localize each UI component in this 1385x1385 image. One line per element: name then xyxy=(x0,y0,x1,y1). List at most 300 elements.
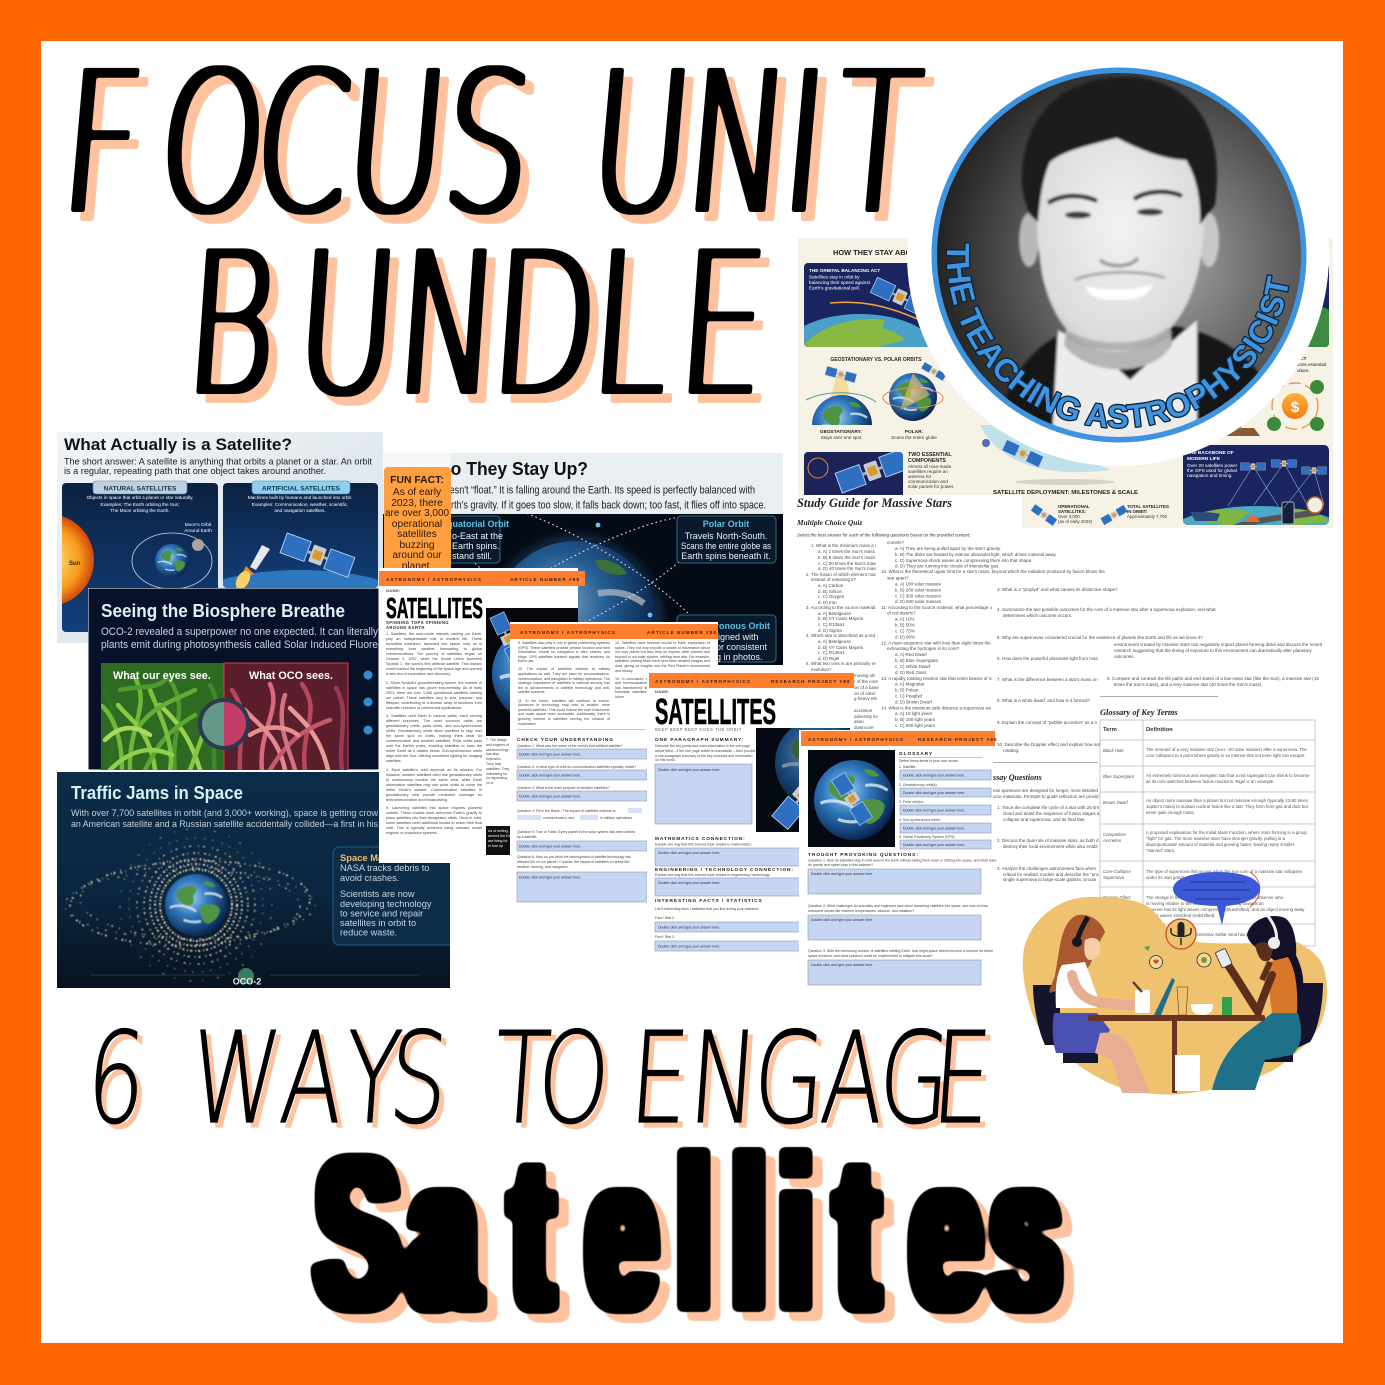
section: glossary: 5. Global Positioning System (GPS): xyxy=(899,835,955,839)
tag: natural satellites: NATURAL SATELLITES xyxy=(104,486,177,492)
chairs xyxy=(1033,983,1323,1063)
quiz column 1: d. D) Iron xyxy=(818,600,837,605)
table: glossary: as its core switches between fusion reactions. Rigel is an example. xyxy=(1146,779,1274,784)
article column 2: 14. Satellites have become crucial to Earth exploration of space. They not only provide a wealth of information about our own planet but also help us explore other planets and beyond in our solar system, orbiting from afar. For example, satellites orbiting Mars have sent back detailed images and data, giving us insights into the Red Planet's environment and history. xyxy=(615,641,710,673)
essay question list: 2. Discuss the dual role of massive stars, as both d xyxy=(997,838,1099,843)
question 4: Question 4: Fill in the Blank - The impact of satellites extends to xyxy=(517,809,616,813)
header band xyxy=(649,673,854,688)
quiz column 1: c. C) R136a1 xyxy=(818,622,845,627)
table: glossary: Supernova xyxy=(1103,875,1125,880)
article body: 2. Since Sputnik's groundbreaking launch, the number of satellites in space has grown exponentially. As of early 2023, there are over 3,000 operational satellites orbiting our planet. These satellites vary in size, purpose, and lifespan, contributing to a diverse array of functions from scientific research to commercial applications. xyxy=(386,680,482,710)
quiz column 2: c. C) 75% xyxy=(895,628,915,634)
subtitle: BEEP BEEP BEEP GOES THE ORBIT xyxy=(655,727,742,732)
quiz column 1: b. B) 8 times the Sun's mass xyxy=(818,555,876,560)
document: Study Guide for Massive Stars xyxy=(796,495,1322,946)
hidden column fragments: on of a base xyxy=(854,685,879,690)
header band xyxy=(801,731,998,746)
question 2: Question 2: In what type of orbit do communication satellites typically reside? xyxy=(517,765,636,769)
circular wordmark: THE TEACHING ASTROPHYSICIST xyxy=(946,242,1290,429)
title: BUNDLE: BUNDLE xyxy=(180,210,773,440)
quiz column 1: 2. The fusion of which element mark xyxy=(806,572,879,577)
section: glossary xyxy=(899,751,991,849)
callout: fun fact: are over 3,000 xyxy=(385,508,449,519)
box: polar orbit: Earth spins beneath it. xyxy=(681,551,771,561)
box: sun-synchronous orbit: Sun-Synchronous Orbit xyxy=(668,621,770,631)
text: 7,700 satellites: an American satellite and a Russian satellite accidentally collided—a first in his xyxy=(71,819,378,830)
quiz column 1: c. C) R136a1 xyxy=(818,650,845,655)
section: one paragraph summary: article titled – if the one page article is unavailable – then provide xyxy=(655,749,755,753)
article columns: 11. In the future, satellites will continue to evolve. Advances in technology may lead to smaller, more powerful satellites. This could reduce the cost of launches and make space more accessible. Additionally, there is growing interest in satellites serving the mission of exploration. xyxy=(518,699,610,726)
diagram: money cycle xyxy=(1222,380,1324,436)
quiz column 1: 6. What two ores in are primarily res xyxy=(806,661,879,666)
card: natural satellites: Sun xyxy=(69,561,81,567)
column 2 fragments: 7. The design and engines of sat technology has also improved. They help satellites. They interesting for us depending on w xyxy=(486,738,509,785)
text: economic impact: tions essential xyxy=(1297,362,1326,367)
section: glossary: 3. Polar orbit(s): xyxy=(899,800,924,804)
stat: total satellites xyxy=(1100,504,1169,525)
quiz column 1: 4. Which star is described as a red xyxy=(806,633,876,638)
circular wordmark: THE TEACHING ASTROPHYSICIST xyxy=(946,244,1288,428)
text: two essential components: TWO ESSENTIAL xyxy=(908,452,952,458)
document: research project page 2 xyxy=(799,730,998,990)
section: interesting facts: Fact / Stat 2: xyxy=(655,935,675,939)
illustration: deployment satellite and swoosh xyxy=(980,425,1115,485)
question 1: Question 1: What was the name of the world's first artificial satellite? xyxy=(517,744,623,748)
card: orbital balancing act xyxy=(804,263,928,347)
header band: ASTRONOMY / ASTROPHYSICS xyxy=(386,577,482,582)
article body: 4. Each satellite's orbit depends on its mission. For instance, weather satellites often use geostationary orbits to continuously monitor the same area, while Earth observation satellites may use polar orbits to cover the entire Earth's surface. Communication satellites in geostationary orbit provide consistent coverage for telecommunication and broadcasting. xyxy=(386,768,482,802)
icons: small reactions xyxy=(1144,946,1211,968)
quiz column 1: a. A) 2 times the Sun's mass xyxy=(818,549,876,554)
short-answer questions: 7. What is the difference between a star's mass on xyxy=(997,677,1098,682)
heading: Seeing the Biosphere Breathe: Seeing the Biosphere Breathe xyxy=(101,600,345,621)
short-answer questions: determines which outcome occurs. xyxy=(1003,613,1072,618)
short-answer questions: 9. Explain the concept of “pebble accretion” as a n xyxy=(997,720,1098,725)
short-answer questions: 6. How does the powerful ultraviolet light from mas xyxy=(997,656,1099,661)
question 4 xyxy=(517,808,642,820)
short-answer questions: 4. Summarize the two possible outcomes for the core of a massive star after a supernova explosion, and what xyxy=(997,607,1216,612)
section: engineering connection: ENGINEERING / TECHNOLOGY CONNECTION: xyxy=(655,867,794,873)
section: thought provoking questions: THOUGHT PROVOKING QUESTIONS: xyxy=(808,852,919,858)
text: two essential components xyxy=(908,452,952,464)
callout: fun fact: operational xyxy=(392,519,442,530)
section: glossary: Double click and type your answer here. xyxy=(903,774,965,778)
quiz column 1: b. B) VY Canis Majoris xyxy=(818,616,864,621)
table: glossary: disproportionate amount of material and growing faster, leaving many smaller, xyxy=(1146,842,1295,847)
callout: fun fact: buzzing xyxy=(399,540,435,551)
black note box: in turn up xyxy=(488,844,503,848)
quiz column 2: 14. What is the minimum safe distance a supernova wo xyxy=(881,706,992,710)
text: components description: solar panels for power. xyxy=(908,484,954,489)
hidden column fragments: g heavy ele xyxy=(854,696,878,701)
question 6: affected life on our planet? Consider the impact of satellites on areas like xyxy=(517,860,630,864)
quiz column 1: b. B) Silicon xyxy=(818,589,843,594)
section: thought provoking questions: Question 1: How do satellites stay in orbit around the Earth without falling back down or drifting into space, and what roles xyxy=(808,858,997,862)
question 3: Question 3: What is the main purpose of weather satellites? xyxy=(517,786,609,790)
card: orbital balancing act: Satellites stay in orbit by xyxy=(809,274,860,280)
box: polar orbit: Polar Orbit xyxy=(703,519,749,529)
heading: glossary of key terms: Glossary of Key Terms xyxy=(1100,708,1178,717)
question 5: Question 5: True or False: Every planet in the solar system has been orbited xyxy=(517,830,635,834)
box: sun-synchronous orbit xyxy=(668,615,776,662)
stat: total satellites: IN ORBIT: xyxy=(1127,509,1148,514)
section: one paragraph summary: on this world. xyxy=(655,758,676,762)
section: glossary: Double click and type your answer here. xyxy=(903,808,965,812)
heading: check your understanding: CHECK YOUR UNDERSTANDING xyxy=(517,737,614,743)
woman on the right xyxy=(1212,914,1303,1090)
table: glossary xyxy=(1100,720,1315,946)
essay column continuation: outcomes. xyxy=(1114,654,1135,659)
text: short answer: The short answer: A satellite is anything that orbits a planet or a star. An orbit xyxy=(64,456,372,468)
hidden column fragments: r of the core xyxy=(854,679,879,684)
text: economic impact: ACT xyxy=(1297,356,1307,361)
text: falling around the Earth: Earth's gravity. If it goes too slow, it falls back down; too fast, it flies off into space. xyxy=(440,500,766,512)
table: glossary: Definition xyxy=(1146,727,1173,733)
callout: fun fact: satellites xyxy=(397,529,437,540)
text: components description: satellites require an xyxy=(908,469,948,474)
section: engineering connection: Double click and type your answer here. xyxy=(658,881,720,885)
text: components description xyxy=(908,464,954,489)
icon: podcast microphone xyxy=(1166,919,1196,949)
table: glossary: has its waves stretched (redshifted). xyxy=(1146,913,1216,918)
section: glossary: GLOSSARY xyxy=(899,751,933,757)
callout: fun fact: As of early xyxy=(393,487,442,498)
section: glossary: 1. Satellite: xyxy=(899,765,916,769)
quiz column 2: d. D) Red Giant xyxy=(895,670,927,675)
question 1 xyxy=(517,744,647,759)
quiz column 1: 3. According to the source material, xyxy=(806,605,877,610)
hidden column fragments xyxy=(854,673,879,730)
section: thought provoking questions: Double click and type your answer here. xyxy=(811,872,873,876)
card: orbital balancing act: THE ORBITAL BALANCING ACT xyxy=(809,268,880,273)
text: 7,700 satellites xyxy=(71,810,378,829)
text: OCO-2 superpower: OCO-2 revealed a superpower no one expected. It can literally xyxy=(101,626,378,638)
section: interesting facts: Fact / Stat 1: xyxy=(655,916,675,920)
stat: operational satellites xyxy=(1031,504,1093,526)
quiz column 1: a. A) Carbon xyxy=(818,583,844,588)
research image xyxy=(756,728,850,832)
section: mathematics connection xyxy=(655,836,801,866)
stat: operational satellites: Over 3,000 xyxy=(1058,514,1080,519)
card: green earth corner xyxy=(1308,265,1329,347)
table: glossary: The remnant of a very massive star (over ~20 solar masses) after a supernova. The xyxy=(1146,747,1307,752)
short-answer questions: rotating. xyxy=(1003,748,1019,753)
stat: operational satellites: OPERATIONAL xyxy=(1058,504,1090,509)
document: article page 1 xyxy=(379,568,590,863)
card: orbital balancing act: balancing their speed against xyxy=(809,280,871,285)
section: glossary: Double click and type your answer here. xyxy=(903,826,965,830)
diagram: polar orbit xyxy=(883,362,946,440)
quiz column 2: d. D) 500 solar masses xyxy=(895,599,942,604)
panel: How Do They Stay Up xyxy=(383,453,783,665)
speech bubble xyxy=(1173,872,1260,925)
logo: OCO-2: OCO-2 xyxy=(233,976,261,986)
panel: What Actually is a Satellite xyxy=(57,432,383,643)
text: economic impact xyxy=(1297,356,1326,373)
short-answer questions: 3. What is a “proplyd” and what causes its distinctive shape? xyxy=(997,587,1118,592)
heading: study guide title: Study Guide for Massive Stars xyxy=(797,496,952,510)
labels: comparison captions: What OCO sees. xyxy=(249,670,333,682)
section: mathematics connection: Double click and type your answer here. xyxy=(658,851,720,855)
text: short answer: is a regular, repeating path that one object takes around another. xyxy=(64,466,326,477)
callout: fun fact xyxy=(384,467,451,577)
heading: Traffic Jams in Space: Traffic Jams in Space xyxy=(71,782,243,803)
box: sun-synchronous orbit: g in photos. xyxy=(716,652,763,662)
quiz column 2: 11. According to the source material, what percentage o xyxy=(881,605,992,610)
image: what OCO sees xyxy=(224,663,348,770)
box: space management: Space Management: xyxy=(340,852,431,863)
section: thought provoking questions: Double click and type your answer here. xyxy=(811,963,873,967)
title: FOCUS UNIT: FOCUS UNIT xyxy=(54,31,928,258)
section: interesting facts: List 5 interesting facts / statistics that you find during your research: xyxy=(655,907,759,911)
section: one paragraph summary: a one-paragraph summary of the key concepts and information xyxy=(655,754,753,758)
card: artificial satellites: and navigation satellites. xyxy=(274,508,326,513)
box: space management: to service and repair xyxy=(340,908,423,918)
section: glossary: Double click and type your answer here. xyxy=(903,843,965,847)
quiz column 2: b. B) 100 light years xyxy=(895,717,936,722)
essay question list: single supernova to large-scale galactic circula xyxy=(1003,877,1097,882)
essay question list: ese questions are designed for longer, more detailed xyxy=(993,788,1098,793)
box: space management: Scientists are now xyxy=(340,889,415,899)
article columns xyxy=(518,641,610,731)
card: backbone of modern life: the GPS used for global xyxy=(1187,468,1237,473)
portrait photo xyxy=(934,70,1304,445)
quiz column 2: b. B) 50% xyxy=(895,622,915,628)
quiz column 2: comets? xyxy=(887,540,905,545)
box: equatorial orbit xyxy=(420,516,509,563)
short-answer questions xyxy=(997,587,1216,753)
box: equatorial orbit: Earth spins. xyxy=(452,541,500,551)
research image xyxy=(808,750,895,847)
essay question list: destroy their local environment while also enabl xyxy=(1003,844,1098,849)
text: OCO-2 superpower: plants emit during photosynthesis called Solar Induced Fluore xyxy=(101,639,378,651)
hidden column fragments: on of outer xyxy=(854,691,876,696)
section: thought provoking questions: space missions, and what solutions could be implemented to mitigate this issue? xyxy=(808,954,933,958)
table: glossary: Jupiter's mass) to sustain nuclear fusion like a star. They form from gas and dust but xyxy=(1146,804,1309,809)
essay column continuation: 5. Compare and contrast the life paths and end states of a low-mass star (like the Sun), a massive star (15 xyxy=(1107,676,1319,681)
text: OCO-2 superpower xyxy=(101,626,378,651)
callout: fun fact: FUN FACT: xyxy=(390,475,444,486)
stat: operational satellites: (as of early 2023) xyxy=(1058,519,1093,524)
short-answer questions: 10. Describe the Doppler effect and explain how ast xyxy=(997,742,1101,747)
table: glossary: The change in frequency or wavelength of radiation to an observer who xyxy=(1146,895,1283,900)
question 6: Question 6: How do you think the development of satellite technology has xyxy=(517,855,631,859)
short-answer questions: 5. Why are supernovae considered crucial for the existence of planets like Earth and life as we know it? xyxy=(997,635,1203,640)
section: one paragraph summary: Double click and type your answer here. xyxy=(658,768,720,772)
box: space management xyxy=(333,847,463,945)
box: equatorial orbit: o-East at the xyxy=(452,531,503,541)
diagram: polar orbit: Scans the entire globe xyxy=(891,435,937,440)
heading: satellite deployment: SATELLITE DEPLOYMENT: MILESTONES & SCALE xyxy=(993,490,1138,496)
article column 2: 15. In conclusion, satellites are a vital part of technology and communication. Our ability to send them into space has transformed life. From the GPS in your phone to forecasts, satellites continue to shape our world and our future. xyxy=(615,677,710,699)
header band: ASTRONOMY / ASTROPHYSICS xyxy=(655,679,751,684)
quiz column 2: 13. A rapidly rotating neutron star that emits beams of X xyxy=(881,676,992,681)
quiz column 2: b. B) 200 solar masses xyxy=(895,588,942,592)
box: space management: NASA tracks debris to xyxy=(340,863,429,873)
masthead: SATELLITES: SATELLITES xyxy=(386,593,483,625)
document: article page 2 xyxy=(510,622,718,905)
article columns: 10. The impact of satellites extends to military applications as well. They are used for reconnaissance, communication, and navigation in military operations. The strategic importance of satellites in national security has led to advancements in satellite technology and anti-satellite systems. xyxy=(518,667,610,694)
question 3: Double click and type your answer here. xyxy=(519,794,581,798)
header band: ASTRONOMY / ASTROPHYSICS xyxy=(520,630,616,635)
quiz column 2: c. C) Supernova shock waves are compressing them into that shape. xyxy=(895,558,1032,563)
quiz column 2: 12. A main-sequence star with less than eight times the xyxy=(881,640,991,646)
subheading: geostationary vs polar: GEOSTATIONARY VS. POLAR ORBITS xyxy=(830,357,922,363)
section: one paragraph summary: ONE PARAGRAPH SUMMARY: xyxy=(655,737,744,743)
article body: 5. Launching satellites into space requires powerful rockets. These rockets must overcome Earth's gravity to place satellites into their designated orbits. Once in orbit, some satellites need additional boosts to reach their final orbit. This is typically achieved using onboard rocket engines or propulsion systems. xyxy=(386,806,482,835)
card: artificial satellites xyxy=(223,483,378,588)
illustration: two women at a podcast table xyxy=(1023,872,1327,1094)
question 5: Double click and type your answer here. xyxy=(519,844,581,848)
essay question list xyxy=(993,788,1100,882)
diagram: geostationary orbit xyxy=(806,366,876,440)
quiz column 1: evolution? xyxy=(811,667,832,672)
text: falling around the Earth xyxy=(432,484,766,512)
quiz column 2: a. A) 10 light years xyxy=(895,711,933,716)
table: glossary: “fight” for gas. The more massive stars have stronger gravity, pulling in a xyxy=(1146,836,1285,841)
card: backbone of modern life: MODERN LIFE xyxy=(1187,456,1221,462)
diagram: money cycle: $ xyxy=(1291,399,1300,416)
subtitle xyxy=(386,620,449,630)
illustration: Earth with debris field xyxy=(65,829,315,981)
quiz column 1: a. A) Betelgeuse xyxy=(818,611,852,616)
section: glossary: Double click and type your answer here. xyxy=(903,791,965,795)
header band: RESEARCH PROJECT #88 xyxy=(771,679,851,684)
tag: artificial satellites: ARTIFICIAL SATELLITES xyxy=(262,486,341,492)
question 4: communication, and xyxy=(543,816,574,820)
text: two essential components: COMPONENTS xyxy=(908,458,946,464)
article body: 1. Satellites, the man-made marvels orbiting our Earth, play an indispensable role in modern life. These incredible machines, launched into space, help us in everything from weather forecasting to global communications. The journey of satellites began on October 4, 1957, when the Soviet Union launched Sputnik 1, the world's first artificial satellite. This historic event marked the beginning of the space age and opened a new era of exploration and discovery. xyxy=(386,632,482,676)
section: thought provoking questions: do gravity and speed play in this balance? xyxy=(808,863,873,867)
heading: Do They Stay Up: Do They Stay Up? xyxy=(438,458,588,479)
heading: Satellites: Satellites xyxy=(315,1114,1061,1353)
image: what our eyes see xyxy=(101,663,224,770)
table: glossary: Black Hole xyxy=(1103,748,1124,753)
section: one paragraph summary xyxy=(655,737,755,824)
question 6 xyxy=(517,855,647,902)
section: interesting facts: Double click and type your answer here. xyxy=(658,944,720,948)
hidden column fragments: moving sfc xyxy=(854,673,876,678)
hidden column fragments: adversity its xyxy=(854,714,879,719)
quiz column 2: c. C) 600 light years xyxy=(895,723,936,728)
quiz column 1 xyxy=(806,544,876,671)
quiz column 2: exhausting the hydrogen in its core? xyxy=(887,646,960,651)
hidden column fragments: accretion xyxy=(854,708,873,713)
section: thought provoking questions: Question 2: What challenges do scientists and engineers face when launching satellites into space, and how do they xyxy=(808,904,988,908)
box: polar orbit: Travels North-South. xyxy=(685,531,767,541)
quiz column 2: a. A) They are being pulled apart by the star's gravity. xyxy=(895,546,1001,551)
header band xyxy=(510,624,718,639)
table: glossary: A massive star where the extensive stellar wind has blown away from the xyxy=(1146,932,1287,937)
callout: fun fact: around our xyxy=(392,550,442,561)
header band: ARTICLE NUMBER #88 xyxy=(510,577,580,582)
text: components description: Almost all man-made xyxy=(908,464,952,469)
panel: infographic How They Stay Above xyxy=(798,238,1333,528)
question 5: by a satellite. xyxy=(517,835,537,839)
question 6: Double click and type your answer here. xyxy=(519,876,581,880)
icons: benefit bullets xyxy=(364,670,372,734)
question 1: Double click and type your answer here. xyxy=(519,752,581,756)
text: 7,700 satellites: With over 7,700 satellites in orbit (and 3,000+ working), space is getting crow xyxy=(71,808,378,819)
subheading: multiple choice quiz: Multiple Choice Quiz xyxy=(796,518,862,527)
card: backbone of modern life: Over 20 satellites power xyxy=(1187,463,1238,468)
question 2: Double click and type your answer here. xyxy=(519,774,581,778)
article column 2 xyxy=(615,641,710,725)
hidden column fragments: ation xyxy=(854,719,864,724)
quiz column 2: d. D) They are running into clouds of interstellar gas. xyxy=(895,564,999,568)
instruction line: Select the best answer for each of the following questions based on the provided context: xyxy=(797,532,971,538)
section: mathematics connection: MATHEMATICS CONNECTION: xyxy=(655,836,746,842)
portrait badge: The Teaching Astrophysicist xyxy=(907,68,1329,466)
box: polar orbit xyxy=(677,516,776,563)
table: glossary: Term xyxy=(1103,727,1117,733)
article body: 3. Satellites orbit Earth in various paths, each serving different purposes. The most common orbits are geostationary orbits, polar orbits, and sun-synchronous orbits. Geostationary orbits allow satellites to stay over the same spot on Earth, making them ideal for communication and weather satellites. Polar orbits pass over the Earth's poles, enabling satellites to scan the entire Earth as it rotates below. Sun-synchronous orbits align with the Sun, offering consistent lighting for imaging satellites. xyxy=(386,714,482,763)
card: artificial satellites: Examples: Communication, weather, scientific, xyxy=(252,502,348,507)
essay question list: collapse and supernova, and its final fate. xyxy=(1003,817,1086,822)
table: glossary: An object more massive than a planet but not massive enough (typically 13-80 times xyxy=(1146,798,1309,803)
quiz column 1: instead of releasing it? xyxy=(811,577,857,582)
table: glossary: core collapses to a point where gravity is so intense that not even light can escape. xyxy=(1146,753,1305,758)
yellow background blob xyxy=(1023,897,1327,1094)
table: glossary: An extremely luminous and energetic star that a red supergiant can shrink to become xyxy=(1146,773,1310,778)
text: economic impact: ulture. xyxy=(1297,368,1310,373)
name field: NAME: xyxy=(655,690,670,694)
stat: total satellites: TOTAL SATELLITES xyxy=(1127,504,1169,509)
heading: 6 WAYS TO ENGAGE: 6 WAYS TO ENGAGE xyxy=(82,1005,996,1152)
table: glossary: Core-Collapse xyxy=(1103,869,1131,874)
table: glossary: A proposed explanation for the Initial Mass Function, where stars forming in a group xyxy=(1146,830,1307,835)
section: interesting facts: INTERESTING FACTS / STATISTICS xyxy=(655,898,763,904)
black note box: As of writing, xyxy=(488,829,509,833)
card: natural satellites: Around Earth xyxy=(184,528,212,533)
table: glossary: Brown Dwarf xyxy=(1103,800,1129,805)
masthead: SATELLITES: SATELLITES xyxy=(655,691,776,732)
labels: comparison captions xyxy=(113,671,332,682)
card: artificial satellites: Machines built by humans and launched into orbit. xyxy=(248,495,352,500)
box: sun-synchronous orbit: or consistent xyxy=(716,642,768,652)
table: glossary: under its own gravity. xyxy=(1146,875,1187,880)
quiz column 2: of red dwarfs? xyxy=(887,610,916,616)
section: glossary: Define these terms in your own words: xyxy=(899,759,959,763)
section: one paragraph summary: Describe the key points and main information in the one page xyxy=(655,744,750,748)
panel: Traffic Jams in Space xyxy=(57,772,463,988)
table: glossary: Accretion xyxy=(1102,838,1122,843)
table: glossary: Doppler Effect xyxy=(1103,895,1131,900)
card: two essential components image xyxy=(804,452,903,495)
section: glossary: 2. Geostationary orbit(s): xyxy=(899,783,938,787)
diagram: polar orbit: POLAR: xyxy=(905,429,924,435)
card: natural satellites: The Moon orbiting the Earth. xyxy=(110,508,170,513)
quiz column 1: d. D) 40 times the Sun's mass xyxy=(818,566,879,571)
quiz column 2: a. A) 100 solar masses xyxy=(895,582,942,586)
quiz column 2: d. D) 90% xyxy=(895,634,915,640)
logo: OCO-2 xyxy=(90,968,420,984)
diagram: geostationary orbit: Stays over one spot xyxy=(821,435,862,440)
tag: artificial satellites xyxy=(252,481,350,494)
quiz column 1: d. D) Sigma xyxy=(818,628,842,633)
black note box: are living for xyxy=(488,839,508,843)
card: natural satellites: Moon's Orbit xyxy=(185,522,212,527)
quiz column 1: c. C) 20 times the Sun's mass xyxy=(818,561,878,566)
woman on the left xyxy=(1049,915,1150,1093)
panel: Seeing the Biosphere Breathe xyxy=(88,588,379,771)
labels: comparison captions: What our eyes see. xyxy=(113,670,211,682)
question 3 xyxy=(517,786,647,801)
essay question list: critical for realistic models and describe the “unc xyxy=(1003,872,1100,877)
box: sun-synchronous orbit: ligned with xyxy=(716,632,759,642)
stat: total satellites: Approximately 7,700 xyxy=(1127,514,1168,519)
box: space management: reduce waste. xyxy=(340,928,397,938)
